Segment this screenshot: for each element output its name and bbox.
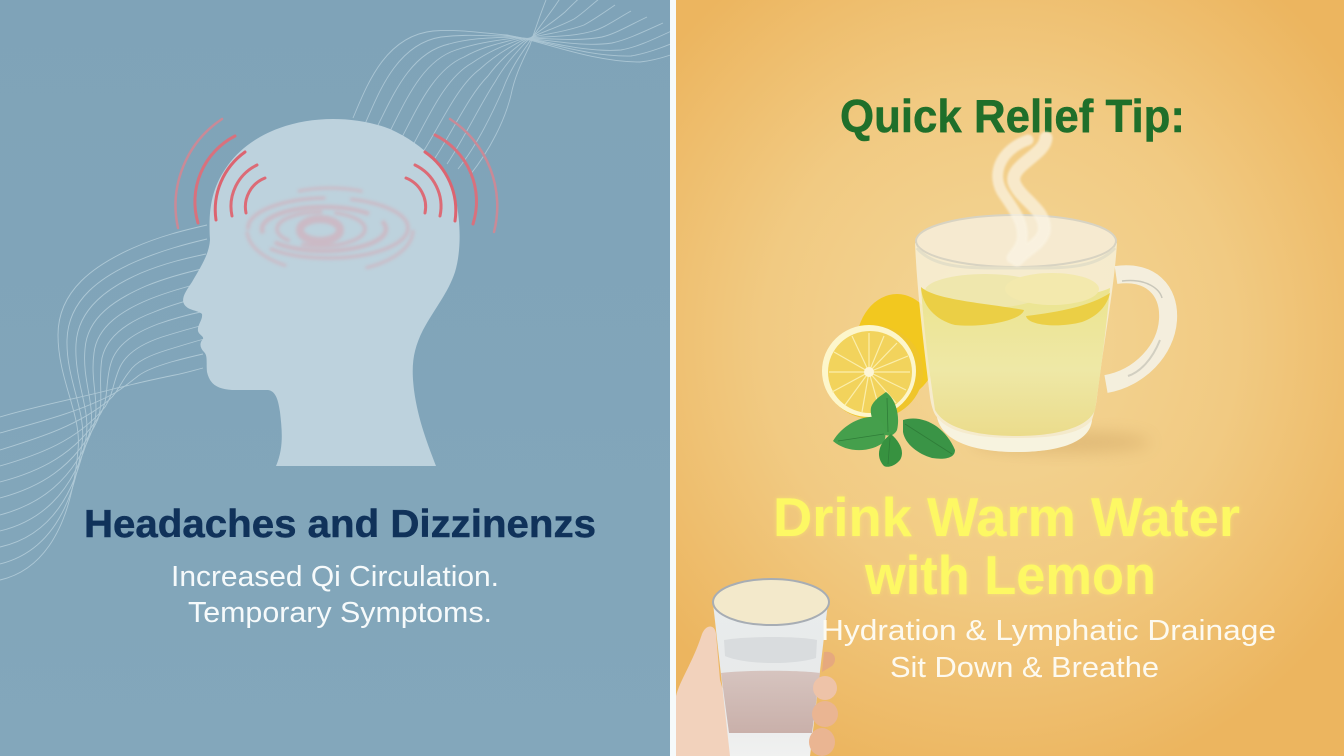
- icon: red pain arcs left: [176, 119, 265, 228]
- icon: mug glass body: [915, 243, 1117, 452]
- icon: lemon water liquid: [921, 288, 1110, 436]
- icon: glass rim: [713, 579, 829, 625]
- icon: mug base: [937, 417, 1092, 452]
- icon: whole lemon: [859, 294, 930, 390]
- illustration: hand holding glass: [676, 579, 838, 756]
- icon: concentric dizziness ripples: [247, 188, 413, 272]
- divider: [670, 0, 676, 756]
- wave lines: upper right: [352, 0, 670, 175]
- icon: glass: [713, 603, 828, 756]
- panel: quick relief tip: [676, 0, 1344, 756]
- illustration: lemon water mug: [822, 138, 1168, 467]
- panel: headaches and dizziness: [0, 0, 710, 756]
- icon: steam: [998, 138, 1046, 260]
- icon: mint leaves: [833, 392, 955, 467]
- glow: main heading: [776, 496, 1240, 596]
- icon: half lemon: [822, 325, 923, 419]
- text: temporary symptoms: Temporary Symptoms.: [188, 597, 492, 629]
- text: sit down and breathe: Sit Down & Breathe: [890, 652, 1159, 684]
- shadow: [970, 431, 1150, 453]
- heading: headaches: Headaches and Dizzinenzs: [84, 503, 596, 546]
- icon: upper floating lemon slices: [921, 273, 1110, 326]
- icon: fingers: [809, 652, 838, 756]
- text: hydration and lymphatic drainage: Hydration & Lymphatic Drainage: [821, 615, 1276, 647]
- icon: milk in glass: [721, 671, 820, 733]
- wave lines: lower left: [0, 225, 207, 580]
- heading: drink warm water: Drink Warm Water: [773, 486, 1240, 548]
- icon: mug rim: [916, 215, 1116, 268]
- glow: main heading: with Lemon: [864, 544, 1156, 606]
- heading: quick relief tip: Quick Relief Tip:: [840, 90, 1185, 142]
- text: increased qi circulation: Increased Qi Circulation.: [171, 561, 499, 593]
- icon: mug handle: [1106, 274, 1168, 384]
- icon: red pain arcs right: [406, 119, 497, 232]
- heading: with lemon: with Lemon: [864, 544, 1156, 606]
- icon: head silhouette: [183, 119, 460, 466]
- glow: main heading: Drink Warm Water: [773, 486, 1240, 548]
- icon: hand palm: [676, 626, 730, 756]
- icon: water band: [724, 637, 817, 663]
